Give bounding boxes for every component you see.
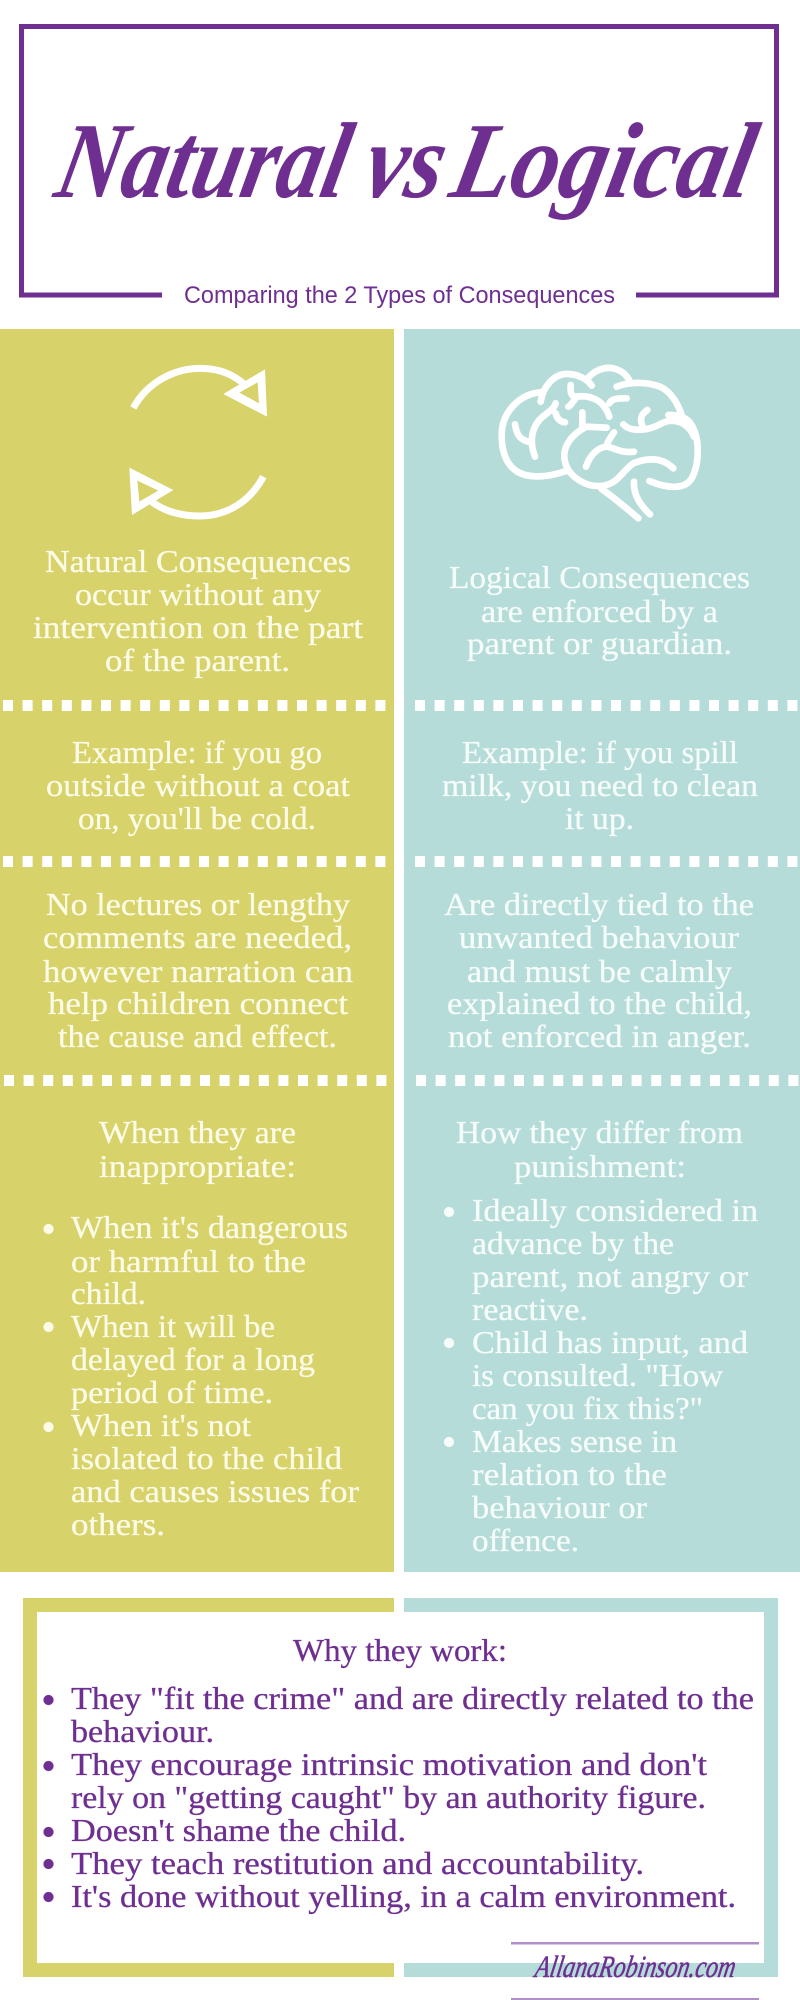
list: how they differ [444,1192,758,1558]
text: logical example [442,734,758,836]
text: natural no lectures: the cause and effect. [58,1018,337,1054]
list: why they work [44,1680,754,1914]
list: when inappropriate: period of time. [71,1374,273,1410]
dotted divider row 1 [3,700,797,711]
list: how they differ: behaviour or [472,1489,647,1525]
list: why they work: They "fit the crime" and are directly related to the [71,1680,754,1716]
list: when inappropriate: When it's not [71,1407,251,1443]
heading: why they work: Why they work: [293,1632,507,1668]
title: vs [355,101,458,221]
text: natural example [46,734,350,836]
panel: natural consequences background [0,329,394,1572]
list: when inappropriate: child. [71,1275,146,1311]
list: how they differ: Ideally considered in [472,1192,758,1228]
list: how they differ: can you fix this?" [472,1390,703,1426]
list: when inappropriate: delayed for a long [71,1341,315,1377]
list: why they work: Doesn't shame the child. [71,1812,406,1848]
text: natural example: Example: if you go [72,734,322,770]
text: logical directly tied: explained to the child, [447,985,752,1021]
panel: why they work frame [23,1598,778,1977]
list: how they differ: relation to the [472,1456,667,1492]
text: logical directly tied: Are directly tied to the [444,886,754,922]
list: when inappropriate: isolated to the child [71,1440,342,1476]
text: logical directly tied: not enforced in anger. [448,1018,751,1054]
text: natural consequences definition: intervention on the part [33,609,363,645]
list: how they differ: Makes sense in [472,1423,677,1459]
list: why they work: It's done without yelling, in a calm environment. [71,1878,736,1914]
text: natural consequences definition [33,543,363,678]
list: when inappropriate [44,1209,359,1542]
dotted divider row 3 [4,1075,798,1086]
text: logical consequences definition: Logical Consequences [449,559,750,595]
list: when inappropriate: others. [71,1506,165,1542]
icon: brain [502,368,698,518]
text: natural consequences definition: of the parent. [105,642,290,678]
list: when inappropriate: or harmful to the [71,1243,306,1279]
heading: when they are inappropriate [99,1114,296,1184]
text: natural example: outside without a coat [46,767,350,803]
list: why they work: rely on "getting caught" by an authority figure. [71,1779,706,1815]
heading: when they are inappropriate: inappropriate: [99,1148,296,1184]
title: Logical [441,101,768,221]
list: how they differ: Child has input, and [472,1324,748,1360]
text: logical consequences definition: are enforced by a [481,593,718,629]
title: Natural [45,101,363,221]
list: when inappropriate: When it will be [71,1308,275,1344]
text: logical consequences definition: parent or guardian. [467,625,732,661]
text: natural no lectures: comments are needed, [43,919,352,955]
text: logical directly tied: unwanted behaviour [459,919,739,955]
text: natural no lectures [43,886,353,1054]
list: how they differ: offence. [472,1522,579,1558]
text: natural no lectures: help children connect [48,985,348,1021]
text: natural example: on, you'll be cold. [78,800,316,836]
title [45,101,768,221]
list: how they differ: parent, not angry or [472,1258,748,1294]
dotted divider row 2 [3,856,797,867]
subtitle: Comparing the 2 Types of Consequences [184,282,615,309]
text: natural no lectures: No lectures or lengthy [46,886,350,922]
heading: how they differ from punishment: How they differ from [456,1114,743,1150]
list: how they differ: advance by the [472,1225,674,1261]
list: why they work: They teach restitution and accountability. [71,1845,644,1881]
text: logical directly tied [444,886,754,1054]
list: how they differ: is consulted. "How [472,1357,723,1393]
text: logical example: it up. [565,800,634,836]
list: why they work: behaviour. [71,1713,214,1749]
text: natural consequences definition: Natural Consequences [45,543,351,579]
text: logical directly tied: and must be calmly [467,953,732,989]
text: natural consequences definition: occur without any [75,576,321,612]
icon: cycle arrows [129,368,267,516]
list: when inappropriate: When it's dangerous [71,1209,348,1245]
header frame [22,26,776,295]
heading: how they differ from punishment: punishment: [514,1148,686,1184]
list: why they work: They encourage intrinsic motivation and don't [71,1746,707,1782]
text: natural no lectures: however narration can [43,953,353,989]
text: logical example: Example: if you spill [462,734,738,770]
heading: when they are inappropriate: When they are [99,1114,296,1150]
list: how they differ: reactive. [472,1291,588,1327]
text: logical example: milk, you need to clean [442,767,758,803]
panel: logical consequences background [404,329,800,1572]
credit: website with rules: AllanaRobinson.com [531,1949,739,1984]
heading: how they differ from punishment [456,1114,743,1184]
text: logical consequences definition [449,559,750,661]
list: when inappropriate: and causes issues for [71,1473,359,1509]
